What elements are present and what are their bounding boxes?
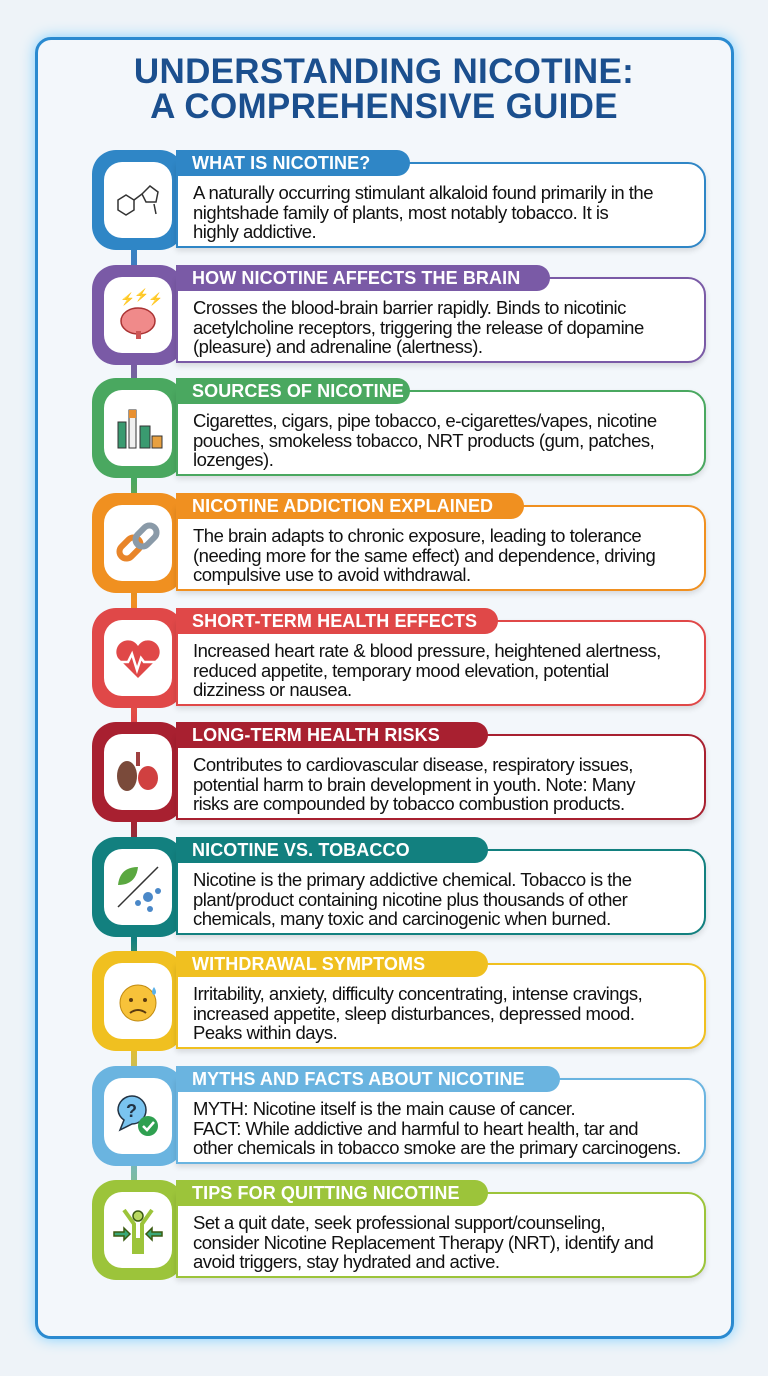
- panel: brain: acetylcholine receptors, triggering the release of dopamine: [193, 316, 644, 338]
- panel: what is nicotine: [92, 150, 708, 252]
- panel: myths and facts: MYTHS AND FACTS ABOUT NICOTINE: [192, 1069, 525, 1089]
- panel: myths and facts: MYTH: Nicotine itself is the main cause of cancer.: [193, 1098, 575, 1119]
- panel: myths and facts: ?: [126, 1101, 137, 1121]
- panel: addiction: compulsive use to avoid withdrawal.: [193, 564, 471, 585]
- panel: brain: (pleasure) and adrenaline (alertness).: [193, 336, 483, 357]
- panel: short-term: dizziness or nausea.: [193, 679, 352, 700]
- panel: sources: [92, 378, 708, 480]
- panel: myths and facts: [92, 1066, 708, 1168]
- panel: short-term: Increased heart rate & blood pressure, heightened alertness,: [193, 640, 661, 661]
- panel: long-term: potential harm to brain development in youth. Note: Many: [193, 774, 635, 794]
- panel: short-term: [92, 608, 708, 710]
- panel: tips for quitting: Set a quit date, seek professional support/counseling,: [193, 1212, 605, 1233]
- panel: long-term: [92, 722, 708, 824]
- panel: what is nicotine: A naturally occurring stimulant alkaloid found primarily in the: [193, 182, 653, 203]
- panel: long-term: Contributes to cardiovascular disease, respiratory issues,: [193, 754, 633, 775]
- title: A COMPREHENSIVE GUIDE: [150, 87, 618, 126]
- panel: addiction: (needing more for the same effect) and dependence, driving: [193, 544, 655, 566]
- panel: withdrawal: Irritability, anxiety, difficulty concentrating, intense cravings,: [193, 983, 642, 1004]
- connector line: [131, 240, 137, 1240]
- panel: brain: HOW NICOTINE AFFECTS THE BRAIN: [192, 268, 520, 288]
- panel: what is nicotine: nightshade family of plants, most notably tobacco. It is: [193, 202, 608, 222]
- panel: short-term: SHORT-TERM HEALTH EFFECTS: [192, 611, 477, 631]
- panel: brain: ⚡: [134, 288, 149, 302]
- panel: sources: SOURCES OF NICOTINE: [192, 381, 404, 401]
- panel: withdrawal: Peaks within days.: [193, 1022, 337, 1043]
- panel: long-term: LONG-TERM HEALTH RISKS: [192, 725, 440, 745]
- panel: nicotine vs tobacco: Nicotine is the primary addictive chemical. Tobacco is the: [193, 869, 632, 890]
- panel: myths and facts: other chemicals in tobacco smoke are the primary carcinogens.: [193, 1137, 681, 1158]
- panel: tips for quitting: avoid triggers, stay hydrated and active.: [193, 1251, 500, 1272]
- panel: withdrawal: WITHDRAWAL SYMPTOMS: [192, 954, 425, 974]
- panel: nicotine vs tobacco: chemicals, many toxic and carcinogenic when burned.: [193, 908, 611, 929]
- title: [134, 52, 634, 126]
- panel: addiction: The brain adapts to chronic exposure, leading to tolerance: [193, 525, 641, 546]
- panel: withdrawal: increased appetite, sleep disturbances, depressed mood.: [193, 1002, 634, 1024]
- panel: tips for quitting: TIPS FOR QUITTING NICOTINE: [192, 1183, 460, 1203]
- panel: addiction: [92, 493, 708, 596]
- panel: short-term: reduced appetite, temporary mood elevation, potential: [193, 660, 609, 680]
- panel: tips for quitting: [92, 1180, 708, 1282]
- panel: nicotine vs tobacco: [92, 837, 708, 940]
- panel: brain: ⚡: [120, 292, 135, 306]
- title: UNDERSTANDING NICOTINE:: [134, 52, 634, 91]
- panel: brain: ⚡: [148, 292, 163, 306]
- panel: nicotine vs tobacco: NICOTINE VS. TOBACCO: [192, 840, 410, 860]
- panel: sources: lozenges).: [193, 449, 273, 470]
- panel: what is nicotine: WHAT IS NICOTINE?: [192, 153, 370, 173]
- panel: brain: Crosses the blood-brain barrier rapidly. Binds to nicotinic: [193, 297, 626, 318]
- panel: addiction: NICOTINE ADDICTION EXPLAINED: [192, 496, 493, 516]
- panel: sources: Cigarettes, cigars, pipe tobacco, e-cigarettes/vapes, nicotine: [193, 410, 657, 431]
- panel: what is nicotine: highly addictive.: [193, 221, 316, 242]
- panel: withdrawal: [92, 951, 708, 1054]
- panel: nicotine vs tobacco: plant/product containing nicotine plus thousands of other: [193, 888, 627, 910]
- panel: tips for quitting: consider Nicotine Replacement Therapy (NRT), identify and: [193, 1232, 653, 1252]
- panel: long-term: risks are compounded by tobacco combustion products.: [193, 793, 625, 814]
- panel: myths and facts: FACT: While addictive and harmful to heart health, tar and: [193, 1118, 638, 1138]
- panel: sources: pouches, smokeless tobacco, NRT products (gum, patches,: [193, 430, 654, 450]
- panel: brain: [92, 265, 708, 368]
